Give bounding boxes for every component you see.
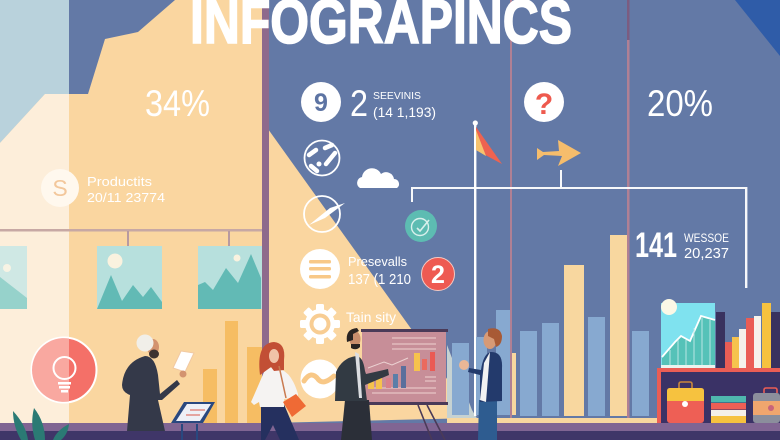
label: WESSOE: WESSOE <box>684 231 729 245</box>
jacket <box>122 356 180 431</box>
hand <box>459 360 469 370</box>
icon: gear <box>300 304 340 344</box>
bag <box>283 394 306 417</box>
hair <box>136 334 154 352</box>
face <box>269 349 279 363</box>
red and yellow briefcase <box>667 382 704 423</box>
icon: wave badge <box>300 360 340 398</box>
bookshelf <box>657 368 780 423</box>
icon: compass <box>304 196 345 232</box>
stat: Productits <box>41 169 165 207</box>
shirt <box>480 352 490 402</box>
stack of folders <box>711 396 746 423</box>
divider lines <box>510 0 630 423</box>
icon: cloud <box>357 168 399 188</box>
hair <box>488 328 502 347</box>
stat: 9 2 seevinis <box>301 82 436 124</box>
value: 137 (1 210 <box>348 272 411 288</box>
picture frame middle <box>97 246 162 309</box>
picture frame left <box>0 246 27 309</box>
number 2: 2 <box>350 83 368 124</box>
hair and beard <box>347 328 360 349</box>
trousers <box>341 400 372 440</box>
jacket <box>468 352 502 402</box>
person: woman with orange bag <box>251 342 306 440</box>
jacket <box>335 356 389 401</box>
icon: 9 badge: 9 <box>314 89 328 117</box>
floor <box>0 423 780 440</box>
person: man in blue jacket <box>459 328 502 440</box>
sweater <box>251 367 298 407</box>
icon: teal check badge <box>405 210 437 242</box>
value: 20/112374: 20/11 23774 <box>87 191 165 205</box>
lectern <box>171 402 215 440</box>
shirt <box>355 352 362 398</box>
label: Tain sity: Tain sity <box>346 309 396 325</box>
label: Presevalls <box>348 254 407 269</box>
number 141: 141 <box>635 226 677 265</box>
bar chart: blue and beige columns <box>447 235 657 423</box>
head <box>147 339 159 355</box>
icon: globe <box>304 140 340 176</box>
stat: 34%: 34% <box>145 83 210 124</box>
left sky panel <box>0 0 69 150</box>
value: 20,237: 20,237 <box>684 246 729 262</box>
icon: flag <box>473 120 502 416</box>
hair <box>259 342 284 375</box>
presentation board <box>361 329 448 440</box>
icon: question badge: ? <box>535 88 553 121</box>
trousers <box>261 402 299 440</box>
grey suitcase <box>753 388 780 423</box>
icon: number 2 badge: 2 <box>431 261 445 289</box>
arrow <box>537 140 581 166</box>
stat: Presevalls <box>348 254 411 288</box>
label: SEEVINIS: SEEVINIS <box>373 90 421 102</box>
person: older man with tablet <box>122 334 194 431</box>
chart poster <box>661 299 715 368</box>
beige stepped backdrop <box>0 0 262 423</box>
hanging rail <box>0 229 262 246</box>
beige diagonal backdrop <box>268 129 475 423</box>
pale light wedge <box>447 345 478 420</box>
stat: 141 wessoe <box>635 226 729 265</box>
hand <box>180 370 186 378</box>
head <box>350 331 360 347</box>
icon: S badge: S <box>52 175 68 201</box>
icon: menu badge <box>300 249 340 289</box>
stat: 20%: 20% <box>647 83 713 124</box>
pale left overlay <box>0 94 69 423</box>
books <box>716 303 780 368</box>
icon: number 2 badge <box>422 258 454 290</box>
yellow bars on beige wall <box>203 321 262 423</box>
label: Productits: Productits <box>87 175 152 189</box>
picture frame right <box>198 246 262 309</box>
vertical divider thick <box>262 8 269 423</box>
bracket connector <box>411 170 747 288</box>
plant <box>13 408 69 440</box>
tablet <box>173 351 194 372</box>
trousers <box>478 400 497 440</box>
beard <box>149 350 159 358</box>
head <box>484 331 496 349</box>
icon: question badge <box>524 82 564 122</box>
value: (14 1,193): (14 1,193) <box>373 104 436 120</box>
icon: light bulb badge <box>32 338 96 402</box>
corner triangle <box>735 0 780 56</box>
person: presenter man <box>335 328 389 440</box>
